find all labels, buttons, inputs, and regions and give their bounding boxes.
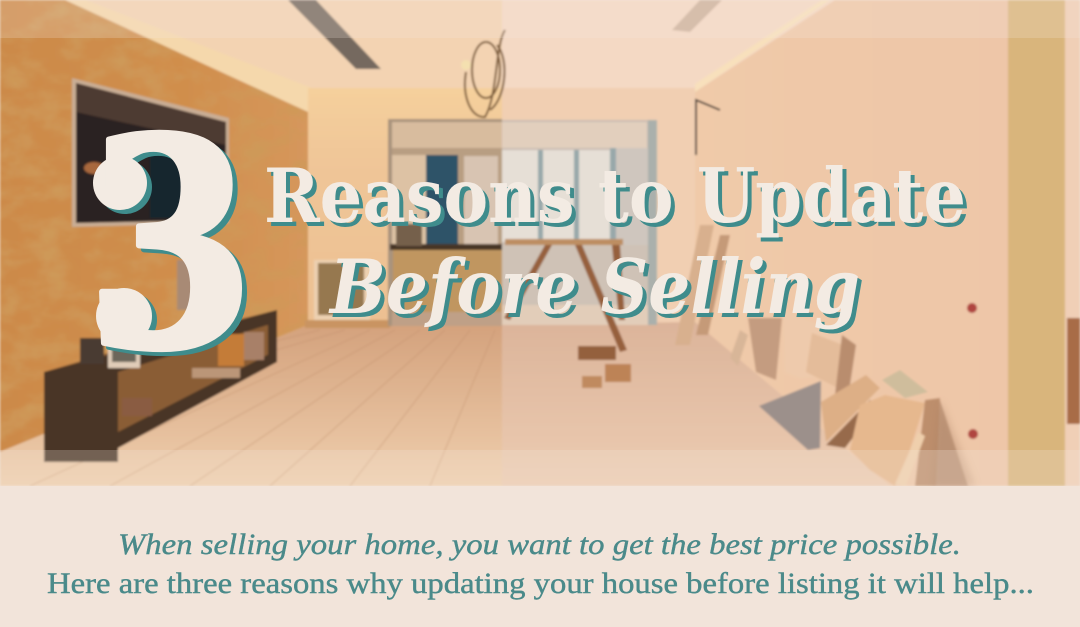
heading: Reasons to Update: Reasons to Update bbox=[268, 156, 970, 244]
TV bbox=[72, 78, 229, 227]
grille panel bbox=[314, 260, 370, 320]
big numeral 3: 3 bbox=[90, 59, 250, 416]
wall art bbox=[176, 259, 190, 311]
leaning timber at back bbox=[675, 225, 714, 345]
opening: balcony right bbox=[501, 119, 649, 246]
soft shadow beside boards bbox=[938, 408, 973, 486]
right wall bbox=[695, 0, 1008, 486]
chandelier bbox=[465, 30, 505, 117]
heading: Before Selling: Before Selling bbox=[328, 243, 860, 331]
panel: intro strip bbox=[0, 486, 1080, 627]
panel: room photo background bbox=[0, 0, 1080, 486]
ceiling bbox=[87, 0, 503, 89]
heading: Before Selling: Before Selling bbox=[332, 247, 864, 335]
wood boards bbox=[821, 375, 880, 442]
intro text line 2: Here are three reasons why updating your house before listing it will help... bbox=[47, 567, 1034, 600]
left orange wall bbox=[0, 0, 308, 452]
opening: kitchen left bbox=[388, 119, 502, 326]
translucent bottom band bbox=[0, 450, 1080, 486]
TV stand bbox=[55, 316, 270, 434]
intro text line 1: When selling your home, you want to get the best price possible. bbox=[118, 528, 961, 561]
red sockets bbox=[967, 303, 977, 313]
rubble bbox=[578, 346, 616, 360]
wire on wall bbox=[696, 100, 720, 155]
leaning boards at back right bbox=[748, 318, 782, 380]
back wall left half bbox=[308, 88, 502, 328]
ceiling light strips bbox=[288, 0, 381, 69]
yellow column bbox=[1008, 0, 1065, 486]
grey triangle board bbox=[759, 381, 821, 450]
floors bbox=[1, 325, 503, 466]
translucent top band bbox=[0, 0, 1080, 38]
heading: Reasons to Update: Reasons to Update bbox=[264, 152, 966, 240]
back wall right half bbox=[504, 88, 694, 90]
big numeral 3: 3 bbox=[95, 63, 255, 420]
workbench bbox=[505, 239, 623, 245]
